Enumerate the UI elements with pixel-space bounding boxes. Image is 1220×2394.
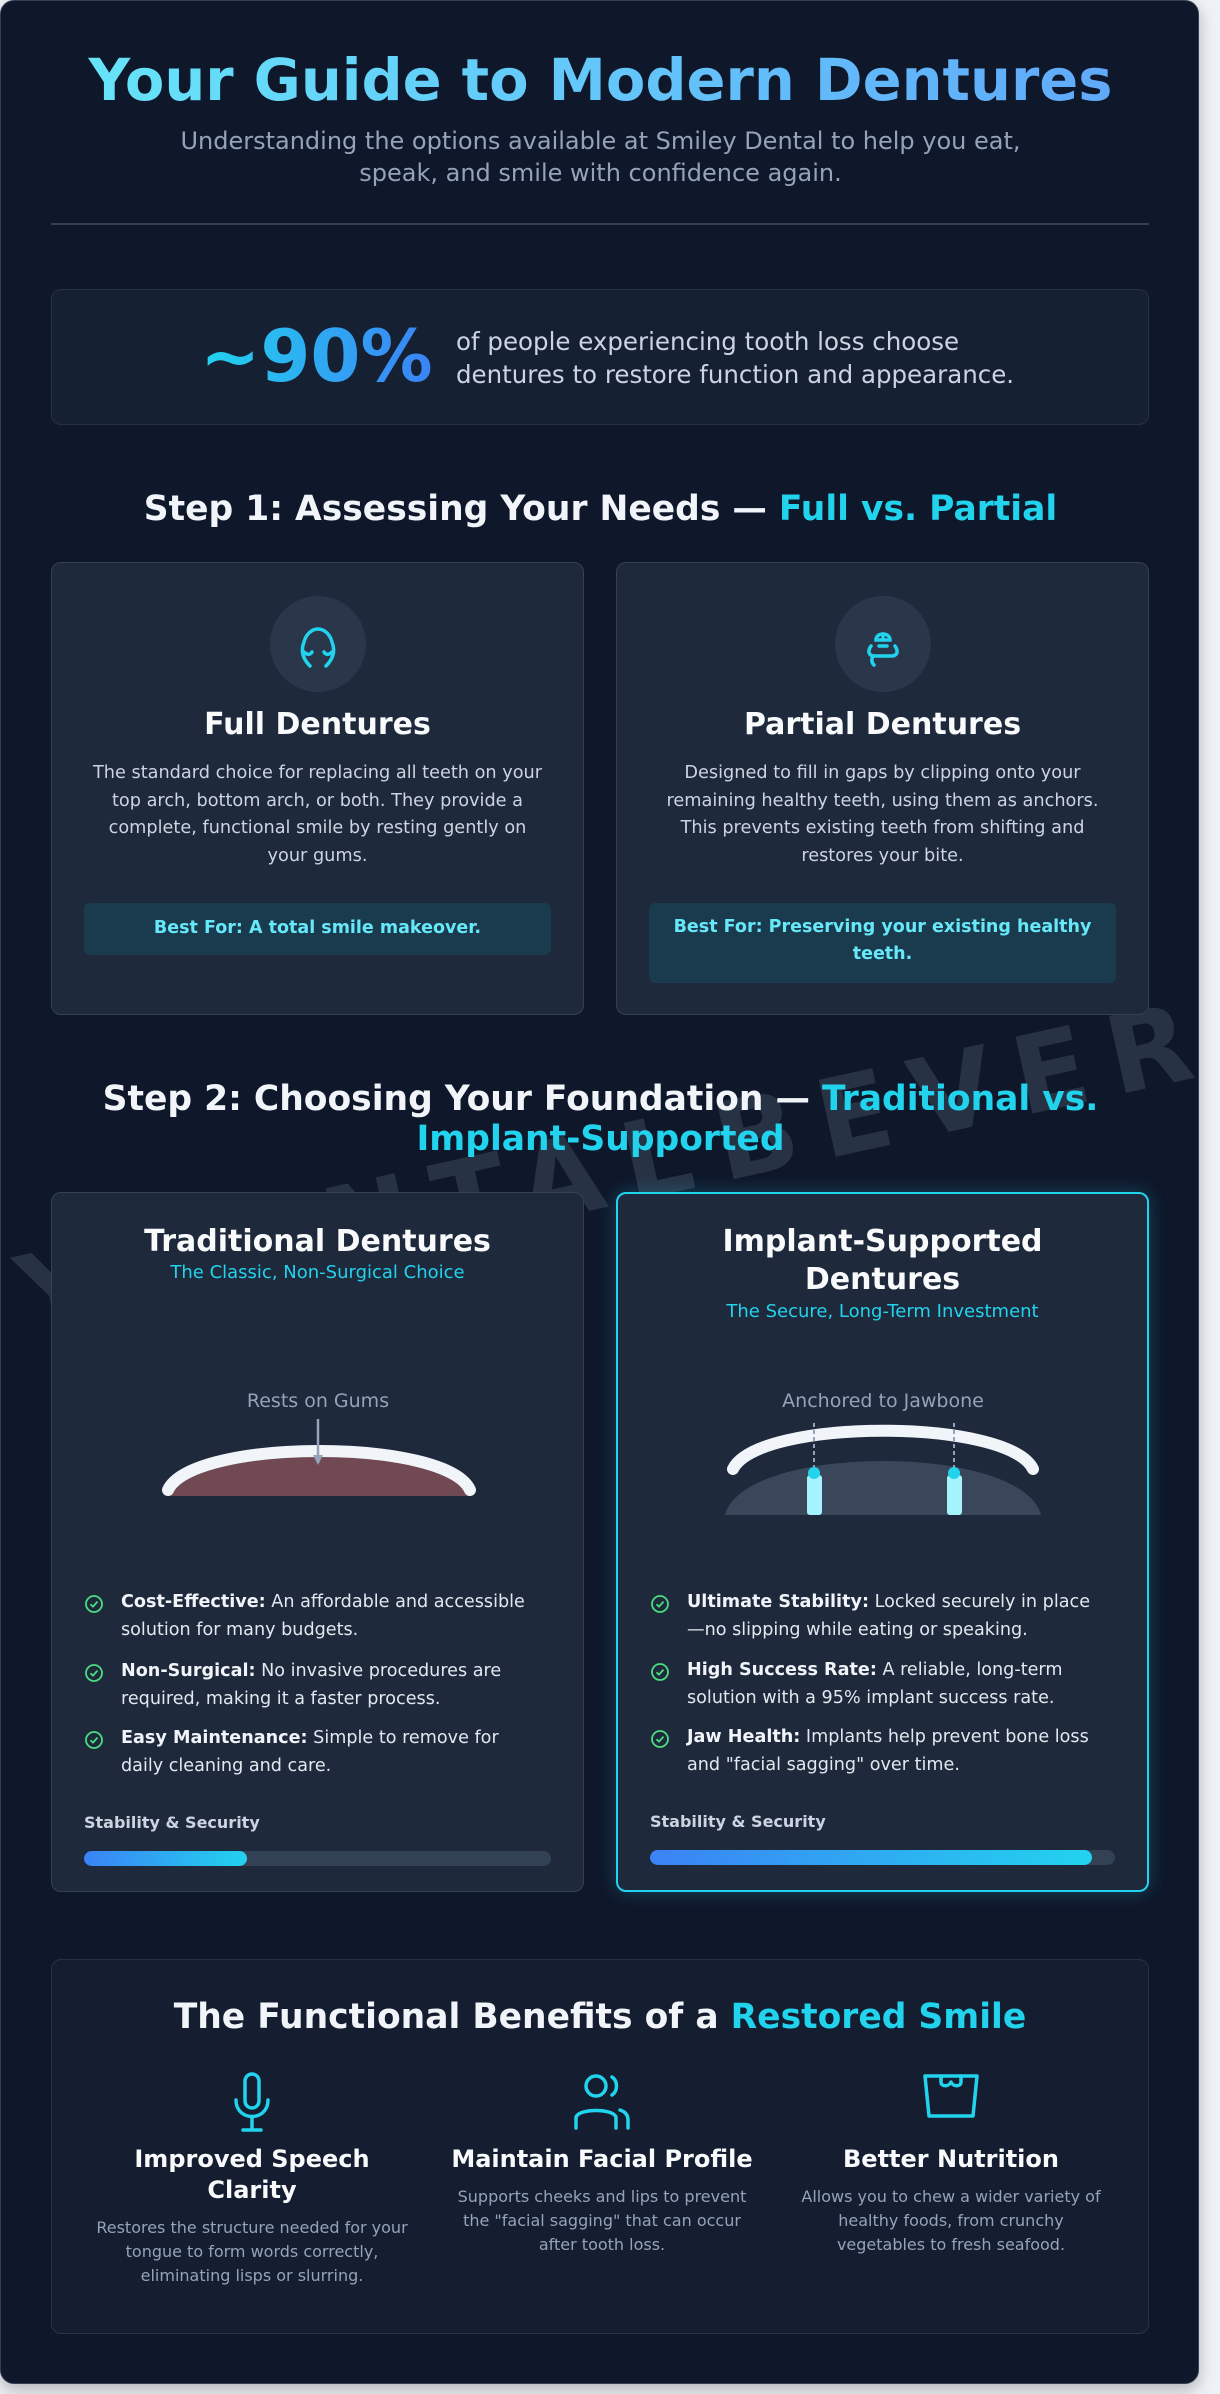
diagram: anchored to jawbone: Anchored to Jawbone: [782, 1390, 984, 1412]
stat callout: [51, 289, 1149, 425]
benefit list: [651, 1592, 1090, 1775]
icon: partial: [835, 596, 931, 692]
panel: traditional dentures: [51, 1192, 584, 1892]
card description: The standard choice for replacing all teeth on your top arch, bottom arch, or both. They provide a complete, functional smile by resting gently on your gums.: [93, 763, 542, 866]
subtitle: The Classic, Non-Surgical Choice: [170, 1262, 465, 1283]
stat number: ~90%: [200, 314, 433, 398]
benefit: nutrition: Allows you to chew a wider variety of healthy foods, from crunchy vegetables to fresh seafood.: [801, 2187, 1101, 2254]
panel: implant-supported dentures: [616, 1192, 1149, 1892]
item: cost-effective: Cost-Effective: An affordable and accessible solution for many budgets.: [121, 1592, 525, 1640]
benefit: speech: Improved Speech Clarity: [134, 2145, 370, 2204]
icon: people: [574, 2074, 630, 2130]
best for: [649, 903, 1116, 983]
card title: Traditional Dentures: [144, 1224, 491, 1259]
subtitle: Understanding the options available at Smiley Dental to help you eat, speak, and smile with confidence again.: [180, 127, 1021, 187]
card title: Implant-Supported Dentures: [722, 1224, 1043, 1297]
heading: step 2: Step 2: Choosing Your Foundation — Traditional vs. Implant-Supported: [103, 1079, 1098, 1159]
diagram: rests on gums: Rests on Gums: [247, 1390, 389, 1412]
benefit: speech: Restores the structure needed for your tongue to form words correctly, eliminating lisps or slurring.: [96, 2218, 408, 2285]
card title: Full Dentures: [204, 707, 431, 742]
card title: Partial Dentures: [744, 707, 1021, 742]
stability label: Stability & Security: [84, 1813, 260, 1832]
item: easy maintenance: Easy Maintenance: Simple to remove for daily cleaning and care.: [121, 1728, 499, 1776]
panel: partial dentures: [616, 562, 1149, 1015]
heading: The Functional Benefits of a Restored Smile: [174, 1997, 1026, 2037]
benefit: facial profile: Supports cheeks and lips to prevent the "facial sagging" that can occur after tooth loss.: [458, 2187, 746, 2254]
item: stability: Ultimate Stability: Locked securely in place —no slipping while eating or speaking.: [687, 1592, 1090, 1640]
benefit: nutrition: [801, 2074, 1101, 2254]
icon: microphone: [234, 2072, 270, 2132]
item: non-surgical: Non-Surgical: No invasive procedures are required, making it a faster process.: [121, 1661, 501, 1709]
item: success rate: High Success Rate: A reliable, long-term solution with a 95% implant success rate.: [687, 1660, 1062, 1708]
icon: bowl: [923, 2074, 979, 2118]
best for: [84, 903, 551, 955]
stability label: Stability & Security: [650, 1812, 826, 1831]
benefit: speech: [96, 2072, 408, 2285]
icon: full arch: [270, 596, 366, 692]
best for: Best For: A total smile makeover.: [154, 918, 481, 938]
item: jaw health: Jaw Health: Implants help prevent bone loss and "facial sagging" over time.: [687, 1727, 1089, 1775]
title: Your Guide to Modern Dentures: [88, 47, 1113, 114]
diagram: rests on gums: [162, 1390, 476, 1496]
diagram: anchored to jawbone: [725, 1390, 1041, 1515]
panel: full dentures: [51, 562, 584, 1015]
panel: functional benefits: [51, 1959, 1149, 2334]
benefit: facial profile: Maintain Facial Profile: [451, 2145, 753, 2173]
stat text: of people experiencing tooth loss choose dentures to restore function and appearance.: [456, 327, 1014, 389]
heading: step 1: Step 1: Assessing Your Needs — Full vs. Partial: [144, 489, 1057, 529]
subtitle: The Secure, Long-Term Investment: [726, 1301, 1039, 1322]
stability bar: [84, 1851, 551, 1866]
benefit: facial profile: [451, 2074, 753, 2254]
card description: Designed to fill in gaps by clipping onto your remaining healthy teeth, using them as anchors. This prevents existing teeth from shifting and restores your bite.: [666, 763, 1098, 866]
best for: Best For: Preserving your existing healthy teeth.: [674, 917, 1091, 964]
benefit: nutrition: Better Nutrition: [843, 2145, 1059, 2173]
stability bar: [650, 1850, 1115, 1865]
benefit list: [85, 1592, 525, 1776]
